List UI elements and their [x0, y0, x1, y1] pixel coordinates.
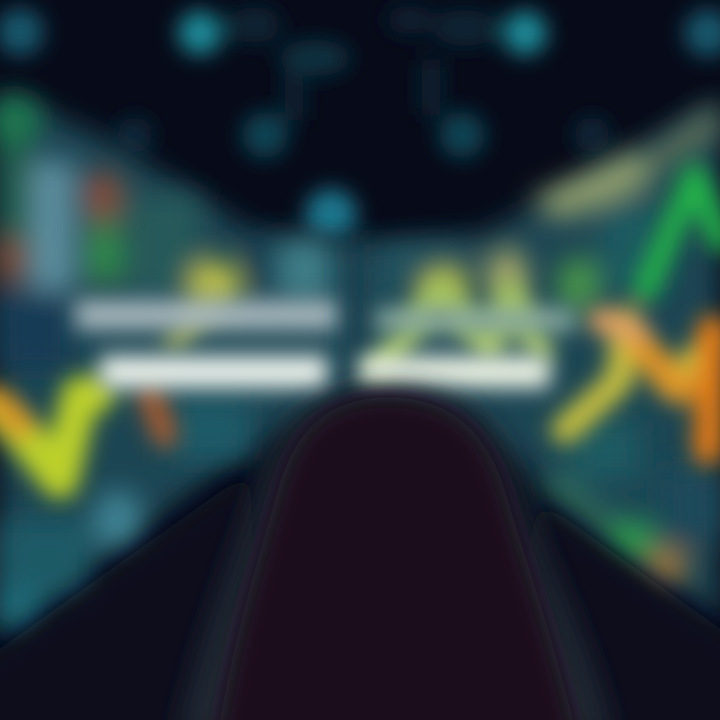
- left wall details: [0, 96, 333, 634]
- floor shadows: [0, 470, 720, 720]
- left white bands: [75, 300, 340, 388]
- left yellow-green line: [0, 295, 215, 480]
- right chart lines: [380, 175, 720, 450]
- right chart wall: [350, 100, 720, 625]
- right wall details: [380, 100, 720, 590]
- right white band: [360, 308, 575, 388]
- person silhouette: [178, 388, 612, 720]
- left chart wall: [0, 90, 370, 640]
- ceiling lights: [0, 6, 720, 241]
